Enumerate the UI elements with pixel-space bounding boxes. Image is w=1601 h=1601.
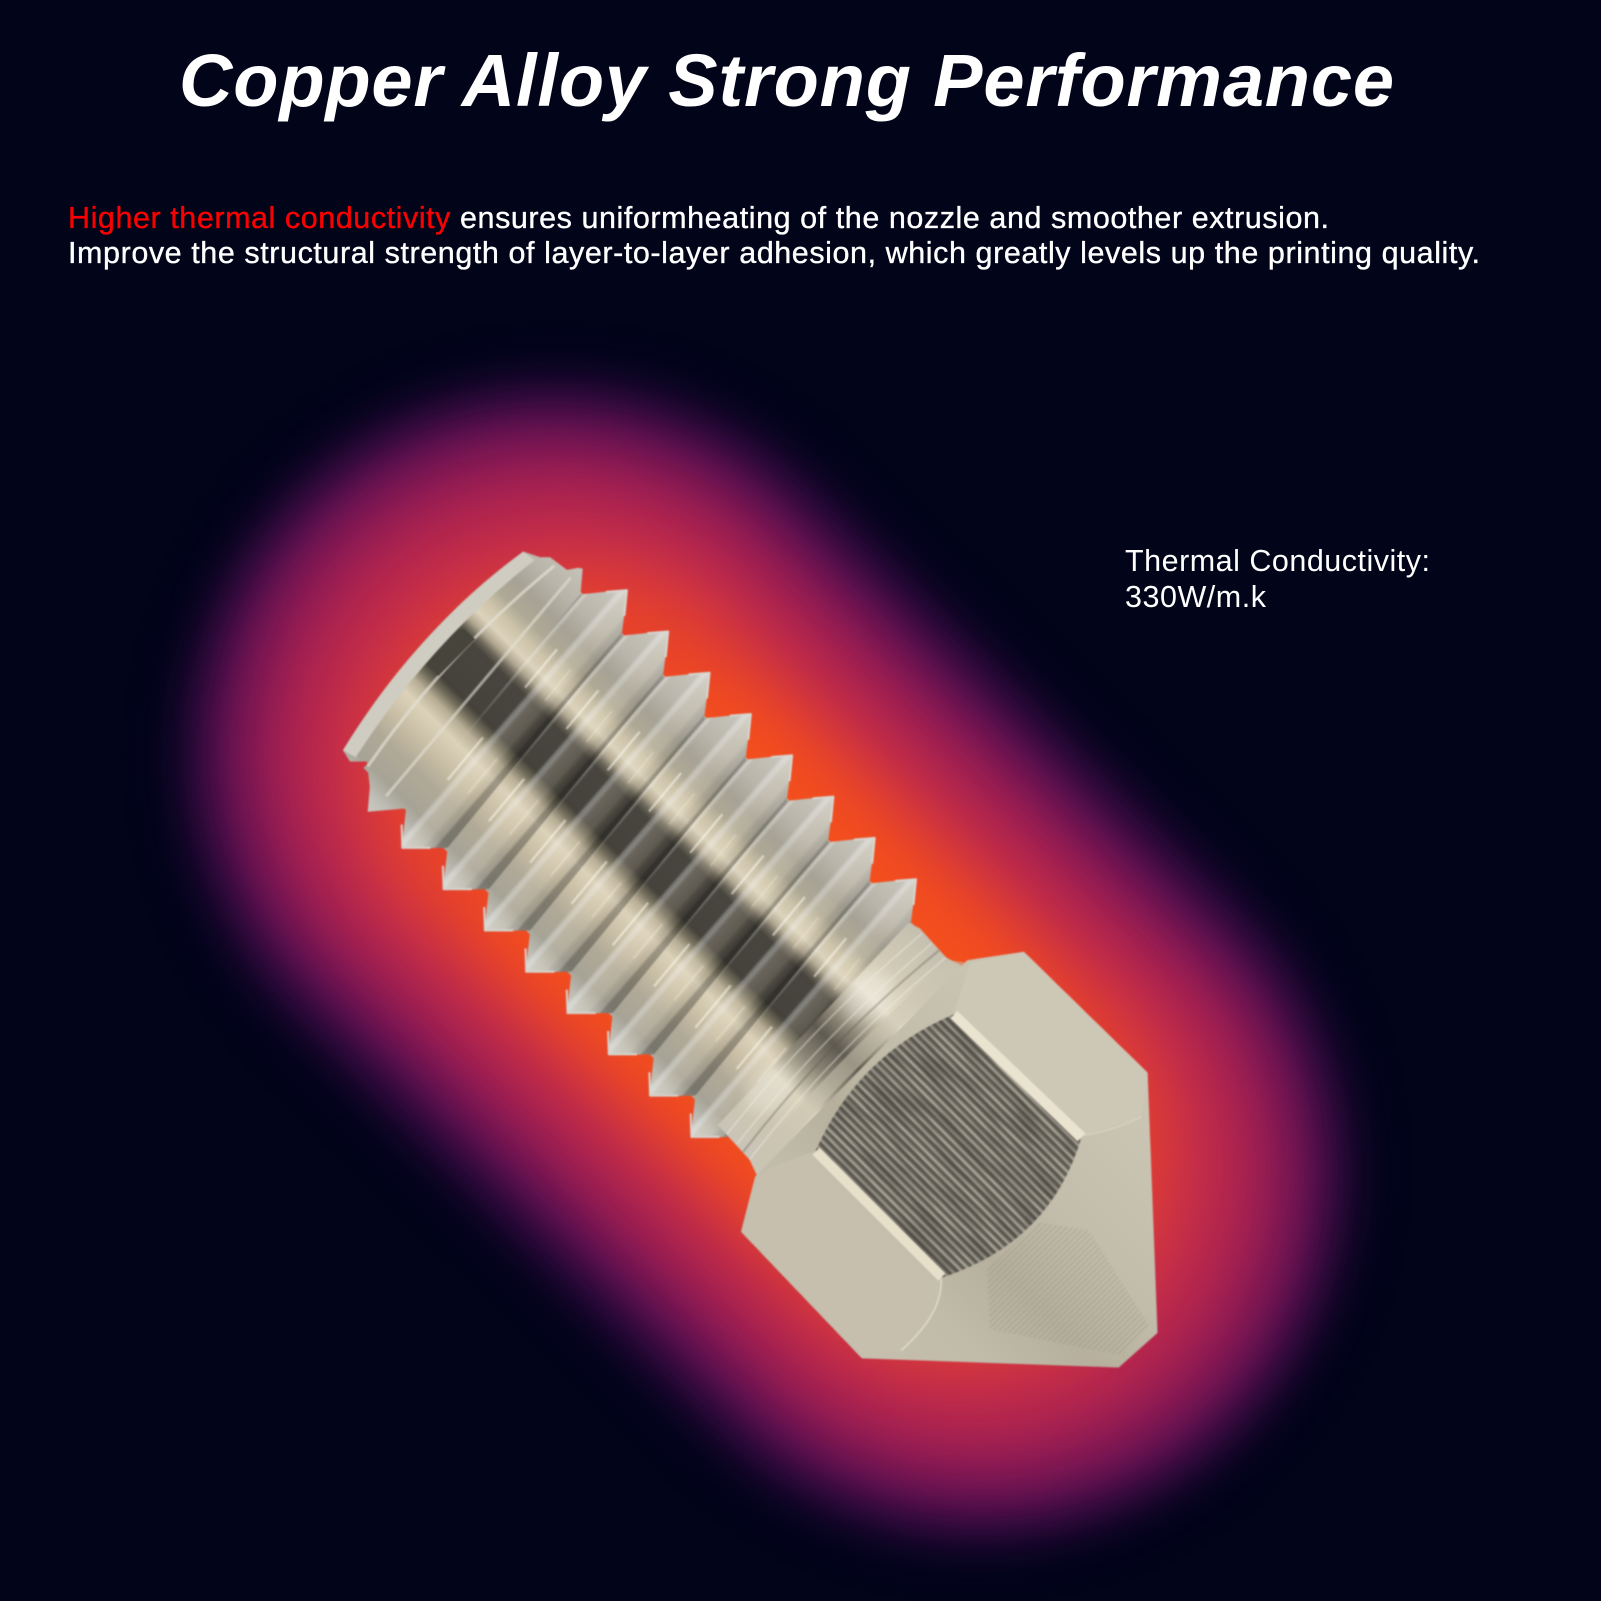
thermal conductivity callout: 330W/m.k — [1125, 580, 1267, 614]
thread end rim — [310, 525, 615, 830]
heat glow behind nozzle — [192, 390, 1342, 1534]
knurled flat face — [815, 1014, 1082, 1278]
cone machining marks — [959, 1199, 1168, 1409]
lower hex side face — [718, 1134, 958, 1374]
bright edge strips — [950, 1008, 1085, 1143]
intro line 2: Improve the structural strength of layer-to-layer adhesion, which greatly levels up the printing quality. — [68, 236, 1480, 270]
thermal conductivity callout: Thermal Conductivity: — [1125, 544, 1430, 578]
title: Copper Alloy Strong Performance — [179, 39, 1394, 122]
thermal conductivity callout — [1125, 544, 1430, 614]
threaded shaft — [309, 513, 956, 1160]
nozzle illustration — [342, 550, 1158, 1368]
intro line 1 with red highlight: Higher thermal conductivity ensures uniformheating of the nozzle and smoother extrusion. — [68, 201, 1329, 235]
thread ridges — [364, 568, 956, 1160]
hex body and cone tip — [740, 950, 1158, 1368]
upper hex side face — [936, 929, 1167, 1160]
neck and collar — [704, 911, 974, 1181]
